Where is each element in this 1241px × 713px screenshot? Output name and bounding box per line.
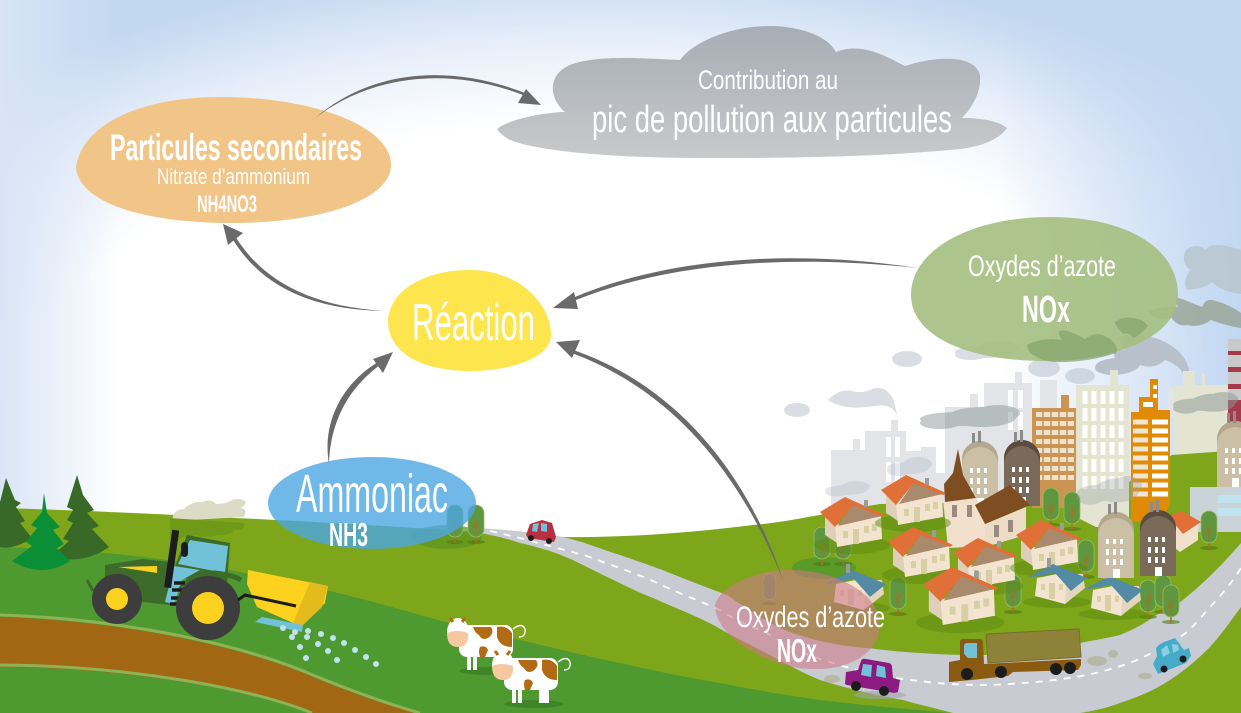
house group — [814, 475, 1086, 633]
factory chimney — [1228, 339, 1241, 430]
road — [470, 528, 1241, 713]
red car — [526, 520, 556, 544]
background city skyline — [831, 372, 1174, 530]
tall cream building — [1076, 370, 1129, 527]
nitrate label: Nitrate d’ammonium — [157, 164, 310, 189]
church — [943, 449, 1030, 548]
traffic heading: Oxydes d’azote — [736, 601, 885, 634]
panel: ammoniac — [268, 457, 476, 549]
slate smoke plume right — [1095, 335, 1191, 380]
reaction label: Réaction — [412, 294, 535, 352]
arrow: particules to cloud — [314, 75, 541, 119]
cow front — [492, 651, 570, 708]
purple car — [845, 659, 906, 699]
traffic formula: NOx — [777, 632, 817, 669]
arrow: ammoniac to reaction — [328, 352, 393, 464]
dark tower behind — [1004, 430, 1040, 506]
olive smoke top right — [1148, 298, 1241, 328]
fertiliser spreader — [238, 570, 328, 632]
panel: reaction — [388, 270, 551, 371]
skyline lit windows — [886, 390, 1023, 482]
NOx heading: Oxydes d’azote — [968, 250, 1116, 283]
orange building — [1131, 379, 1170, 522]
particules heading: Particules secondaires — [110, 127, 362, 168]
panel: particules secondaires — [76, 97, 391, 223]
trees near Ammoniac — [412, 505, 485, 549]
small orange house — [1168, 511, 1201, 552]
front towers — [1098, 411, 1241, 578]
tan building — [1032, 395, 1077, 508]
arrow: reaction to particules — [223, 224, 386, 311]
formula NH4NO3: NH4NO3 — [197, 191, 257, 218]
exhaust puffs — [824, 650, 1152, 683]
fir trees — [0, 475, 109, 570]
smoke seen through bubble — [1027, 318, 1148, 362]
tractor smoke — [170, 499, 246, 551]
cloud title small: Contribution au — [698, 65, 838, 95]
tractor — [87, 530, 241, 640]
cloud title large: pic de pollution aux particules — [592, 99, 952, 141]
arrow: oxydes to reaction — [553, 258, 917, 309]
tree under pink bubble — [762, 574, 777, 605]
blue roof houses — [822, 558, 1147, 620]
ground: olive hills — [0, 450, 1241, 713]
cow back — [447, 618, 525, 675]
dark green patch by village — [792, 557, 856, 579]
ammoniac label: Ammoniac — [296, 464, 448, 524]
road centre dashes — [490, 531, 1241, 685]
dark green field — [0, 547, 950, 713]
smoke over cream building — [1077, 476, 1142, 505]
tall beige building right — [1174, 371, 1228, 505]
small light smoke over village — [825, 457, 932, 496]
greyish cloud top right — [1184, 245, 1241, 294]
blue car — [1153, 638, 1191, 674]
trees by the houses — [813, 488, 1218, 624]
factory block — [1190, 487, 1241, 532]
panel: oxydes d'azote (city) — [911, 217, 1178, 362]
city smoke over buildings — [920, 392, 1238, 429]
arrow: traffic to reaction — [556, 340, 783, 580]
panel: oxydes d'azote (traffic) — [715, 570, 885, 669]
pale smoke puffs — [784, 341, 1095, 417]
cloud: contribution au pic de pollution — [497, 26, 1007, 158]
NH3 label: NH3 — [329, 516, 368, 553]
NOx formula: NOx — [1022, 289, 1070, 331]
brown ploughed strip — [0, 615, 420, 713]
fertiliser granules — [280, 625, 379, 667]
truck — [949, 629, 1081, 682]
back towers — [962, 431, 998, 507]
